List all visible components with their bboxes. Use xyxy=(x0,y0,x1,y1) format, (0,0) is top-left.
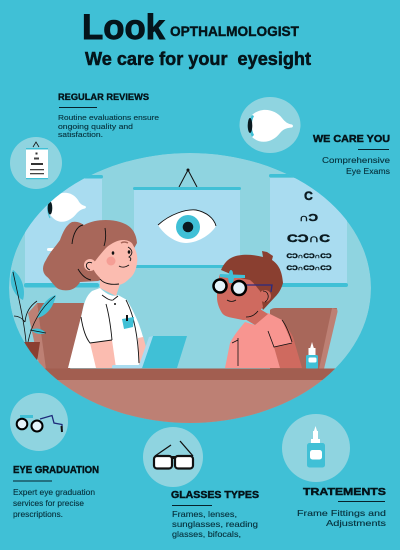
panel: eye graduation: Expert eye graduation xyxy=(13,488,95,497)
trial lens frame xyxy=(220,274,245,283)
poster: right with letters: CƆ∩CƆ∩CƆ xyxy=(286,266,332,272)
arm back xyxy=(274,320,302,368)
panel: eye graduation: services for precise xyxy=(13,499,85,508)
panel: eye graduation xyxy=(13,464,99,519)
arm right xyxy=(138,336,146,368)
hair xyxy=(221,251,283,310)
poster: right with letters: ∩Ɔ xyxy=(299,213,318,224)
eye drops bottle xyxy=(306,342,318,369)
lenses xyxy=(214,280,226,292)
illustration: clinic scene xyxy=(9,153,371,423)
face lines xyxy=(119,247,132,267)
pocket xyxy=(122,317,134,329)
eyes xyxy=(112,251,114,255)
icon: eye drops xyxy=(282,414,350,482)
coat lines xyxy=(81,295,139,363)
poster: right with letters: C xyxy=(304,189,313,203)
panel: we care you: Comprehensive xyxy=(322,155,390,165)
laptop xyxy=(112,336,187,368)
face lines xyxy=(227,291,292,366)
panel: treatments: TRATEMENTS xyxy=(303,486,386,498)
panel: regular reviews xyxy=(58,92,159,139)
panel: we care you xyxy=(313,133,390,176)
face xyxy=(92,240,137,285)
panel: glasses types: sunglasses, reading xyxy=(172,520,258,529)
glasses arm xyxy=(246,285,272,292)
subtitle: We care for your eyesight xyxy=(85,49,311,69)
title: OPTHALMOLOGIST xyxy=(170,24,300,39)
title xyxy=(82,8,300,47)
icon: eyeball xyxy=(240,97,300,153)
panel: we care you: Eye Exams xyxy=(346,166,390,176)
panel: glasses types: glasses, bifocals, xyxy=(172,530,241,539)
forearm xyxy=(90,340,116,368)
chair: right xyxy=(270,308,338,369)
coat xyxy=(68,288,143,368)
title: Look xyxy=(82,8,166,47)
plant xyxy=(11,270,56,362)
shirt xyxy=(225,313,292,368)
room background xyxy=(9,153,371,423)
icon: eye chart xyxy=(10,137,62,189)
neck xyxy=(100,276,120,296)
panel: glasses types: GLASSES TYPES xyxy=(171,490,259,501)
nurse xyxy=(43,220,146,368)
icon: glasses xyxy=(143,427,203,487)
panel: treatments xyxy=(297,486,386,528)
poster: left with eye xyxy=(20,175,103,288)
ear xyxy=(259,290,271,302)
chair: left xyxy=(28,303,84,369)
panel: glasses types xyxy=(171,490,259,539)
panel: treatments: Frame Fittings and xyxy=(297,508,386,518)
icon: trial frames xyxy=(10,393,68,451)
neck xyxy=(246,310,268,325)
panel: treatments: Adjustments xyxy=(326,518,386,528)
panel: regular reviews: Routine evaluations ensure xyxy=(58,113,159,122)
panel: regular reviews: ongoing quality and xyxy=(58,122,133,131)
desk xyxy=(44,368,336,423)
face xyxy=(217,274,263,320)
ear xyxy=(84,259,96,271)
poster: right with letters: CƆ∩CƆ∩CƆ xyxy=(286,254,332,260)
panel: eye graduation: prescriptions. xyxy=(13,510,63,519)
cheek xyxy=(106,256,116,266)
poster: right with letters xyxy=(269,174,353,287)
poster: right with letters: CƆ∩C xyxy=(287,233,330,245)
panel: eye graduation: EYE GRADUATION xyxy=(13,464,99,476)
poster: center with eye xyxy=(133,168,241,268)
eyebrow xyxy=(121,242,128,243)
boy patient xyxy=(214,251,302,368)
panel: glasses types: Frames, lenses, xyxy=(172,510,237,519)
hair xyxy=(43,220,137,290)
panel: regular reviews: satisfaction. xyxy=(58,130,103,139)
panel: we care you: WE CARE YOU xyxy=(313,133,390,145)
panel: regular reviews: REGULAR REVIEWS xyxy=(58,92,149,103)
